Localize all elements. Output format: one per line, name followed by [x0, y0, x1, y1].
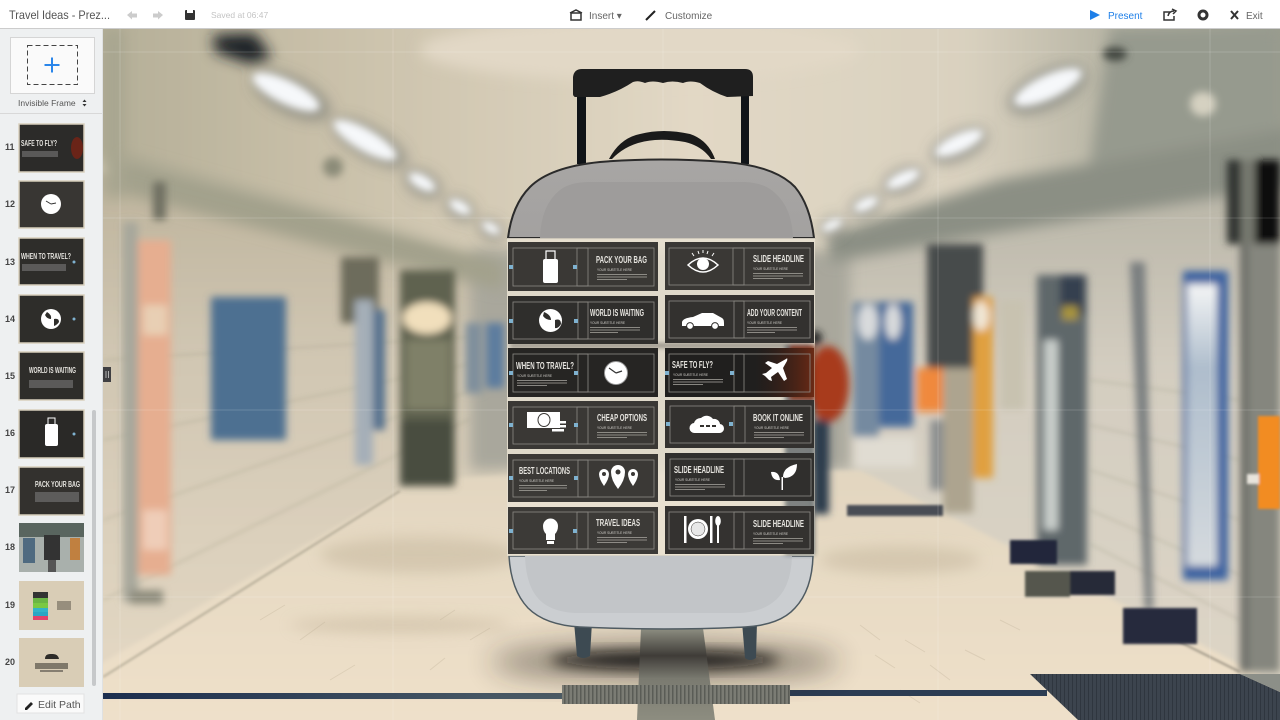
slide panel backing — [507, 238, 815, 556]
card: world is waiting — [508, 296, 658, 344]
card: safe to fly — [665, 348, 814, 397]
suitcase upper shell — [508, 160, 814, 238]
edit path button — [17, 694, 84, 713]
slide 12 thumbnail — [5, 181, 84, 228]
card: slide headline (leaf): YOUR SUBTITLE HERE — [675, 478, 711, 482]
add frame button — [10, 38, 94, 94]
slide 11 thumbnail: SAFE TO FLY? — [21, 139, 57, 148]
exit button — [1231, 11, 1263, 22]
present button: Present — [1108, 11, 1143, 22]
icon: plate and cutlery — [684, 516, 721, 543]
walking person — [807, 331, 849, 514]
card: travel ideas: YOUR SUBTITLE HERE — [597, 531, 633, 535]
scrollbar — [92, 410, 96, 686]
slide 15 thumbnail — [5, 352, 84, 400]
card: pack your bag — [508, 242, 658, 291]
card: travel ideas: TRAVEL IDEAS — [596, 518, 640, 529]
card: slide headline (eye): YOUR SUBTITLE HERE — [753, 267, 789, 271]
edit path button: Edit Path — [38, 699, 81, 711]
icon: cloud — [689, 416, 724, 433]
card: slide headline (cutlery) — [665, 506, 814, 554]
carry handle — [609, 131, 715, 159]
card: world is waiting: YOUR SUBTITLE HERE — [590, 321, 626, 325]
card: slide headline (cutlery): YOUR SUBTITLE HERE — [753, 532, 789, 536]
sidebar collapse tab — [103, 367, 111, 382]
recessed panel — [540, 182, 793, 238]
save status: Saved at 06:47 — [211, 10, 268, 20]
slide 15 thumbnail: 15 — [5, 371, 15, 381]
wall tile lines — [103, 337, 1240, 620]
insert menu — [570, 10, 622, 22]
icon: suitcase — [543, 251, 558, 283]
card: world is waiting: WORLD IS WAITING — [590, 308, 644, 319]
slide 20 thumbnail — [5, 638, 84, 687]
icon: eye — [688, 250, 718, 272]
card: cheap options: CHEAP OPTIONS — [597, 413, 647, 424]
slide 14 thumbnail: 14 — [5, 314, 15, 324]
icon: undo and redo — [127, 11, 163, 20]
slide 16 thumbnail — [5, 410, 84, 458]
document title: Travel Ideas - Prez... — [9, 8, 110, 22]
slide 19 thumbnail: 19 — [5, 600, 15, 610]
card: book it online: BOOK IT ONLINE — [753, 413, 803, 424]
card: add your content: YOUR SUBTITLE HERE — [747, 321, 783, 325]
customize button: Customize — [665, 11, 713, 22]
card: cheap options: YOUR SUBTITLE HERE — [597, 426, 633, 430]
slide 17 thumbnail: 17 — [5, 485, 15, 495]
blurred figures behind panel — [510, 343, 815, 555]
card: slide headline (leaf) — [665, 453, 814, 501]
navy floor line — [103, 693, 563, 699]
exit button: Exit — [1246, 11, 1263, 22]
slide 13 thumbnail: 13 — [5, 257, 15, 267]
card: cheap options — [508, 401, 658, 449]
slide 20 thumbnail: 20 — [5, 657, 15, 667]
icon: car — [682, 313, 724, 329]
card: book it online: YOUR SUBTITLE HERE — [754, 426, 790, 430]
ceiling light fixtures — [213, 33, 1093, 245]
slide 13 thumbnail: WHEN TO TRAVEL? — [21, 252, 71, 261]
icon: globe — [539, 309, 562, 332]
card: when to travel: WHEN TO TRAVEL? — [516, 361, 574, 372]
slide 13 thumbnail — [5, 238, 84, 285]
card: slide headline (eye) — [665, 242, 814, 290]
icon: share — [1164, 9, 1176, 20]
present button — [1090, 10, 1143, 22]
left sidebar — [0, 29, 111, 720]
icon: banknotes — [527, 412, 566, 432]
tactile strip — [637, 628, 715, 720]
card: safe to fly: SAFE TO FLY? — [672, 360, 713, 371]
slide 12 thumbnail: 12 — [5, 199, 15, 209]
card: when to travel: YOUR SUBTITLE HERE — [517, 374, 553, 378]
left wall features — [123, 157, 504, 604]
icon: save — [185, 10, 195, 20]
card: best locations: BEST LOCATIONS — [519, 466, 570, 477]
slide 18 thumbnail: 18 — [5, 542, 15, 552]
icon: airplane — [762, 358, 787, 381]
card: pack your bag: YOUR SUBTITLE HERE — [597, 268, 633, 272]
slide 11 thumbnail: 11 — [5, 142, 15, 152]
card: pack your bag: PACK YOUR BAG — [596, 255, 647, 266]
selector arrows — [82, 100, 86, 106]
card: travel ideas — [508, 507, 658, 554]
card: book it online — [665, 400, 814, 448]
slide 14 thumbnail — [5, 295, 84, 343]
slide 11 thumbnail — [5, 124, 84, 172]
suitcase floor shadow — [490, 642, 840, 682]
slide 16 thumbnail: 16 — [5, 428, 15, 438]
wheels — [574, 622, 757, 660]
ceiling band left and right — [103, 20, 1280, 290]
icon: plant — [771, 464, 797, 490]
icon: map pins — [599, 465, 638, 489]
telescopic handle — [573, 69, 753, 164]
card: best locations — [508, 454, 658, 502]
insert menu: Insert ▾ — [589, 11, 622, 22]
suitcase lower shell — [509, 556, 813, 629]
slide 17 thumbnail: PACK YOUR BAG — [35, 480, 80, 489]
card: best locations: YOUR SUBTITLE HERE — [519, 479, 555, 483]
entrance mat — [1030, 674, 1280, 720]
card: safe to fly: YOUR SUBTITLE HERE — [673, 373, 709, 377]
floor soft bands and tile joints — [290, 537, 980, 633]
slide 19 thumbnail — [5, 581, 84, 630]
right wall features — [853, 47, 1280, 672]
card: slide headline (eye): SLIDE HEADLINE — [753, 254, 804, 265]
top toolbar — [0, 0, 1280, 29]
icon: light bulb — [543, 518, 558, 544]
slide 17 thumbnail — [5, 467, 84, 515]
frame type selector: Invisible Frame — [18, 98, 76, 108]
card: add your content — [665, 295, 814, 343]
slide 15 thumbnail: WORLD IS WAITING — [29, 366, 76, 375]
card: add your content: ADD YOUR CONTENT — [747, 308, 802, 319]
card: slide headline (leaf): SLIDE HEADLINE — [674, 465, 724, 476]
icon: clock — [604, 362, 628, 384]
card: when to travel — [508, 348, 658, 397]
slide 18 thumbnail — [5, 523, 84, 572]
icon: settings — [1199, 11, 1207, 19]
suitcase — [508, 69, 814, 660]
tactile mat — [562, 685, 790, 704]
card: slide headline (cutlery): SLIDE HEADLINE — [753, 519, 804, 530]
